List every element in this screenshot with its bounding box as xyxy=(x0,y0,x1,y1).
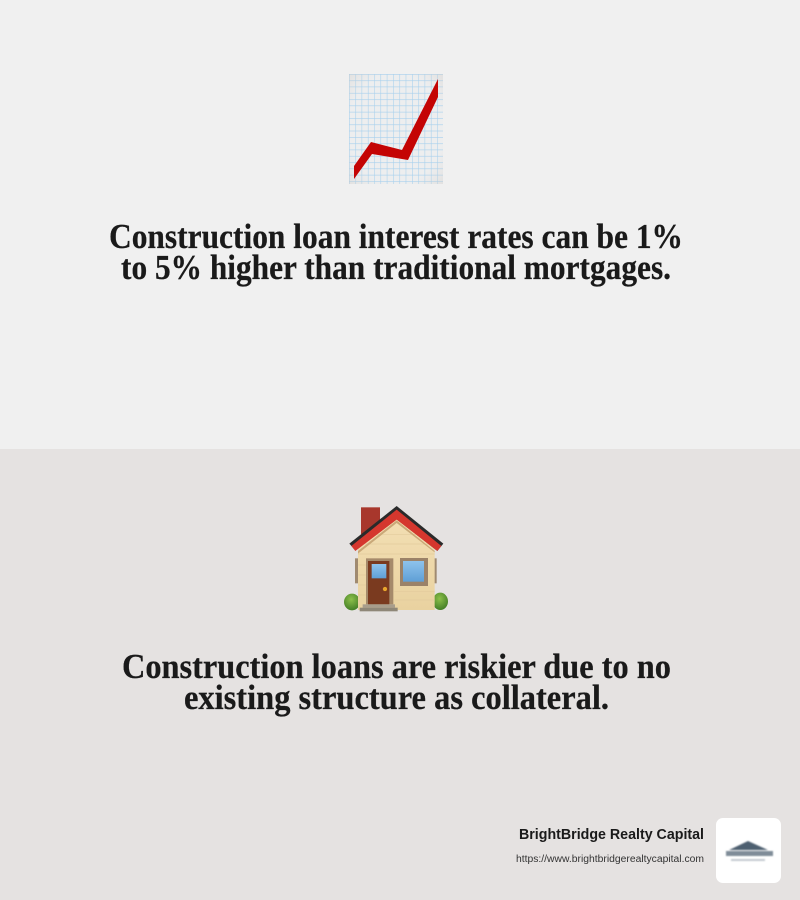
icon: house xyxy=(344,506,448,611)
heading: collateral statement: Construction loans are riskier due to no xyxy=(122,647,671,686)
panel: collateral risk xyxy=(0,449,800,900)
icon: chart increasing xyxy=(349,74,443,184)
heading: interest rates statement: Construction loan interest rates can be 1% xyxy=(109,217,683,256)
logo card xyxy=(716,818,781,883)
heading: interest rates statement xyxy=(109,217,683,287)
footer: brand xyxy=(516,818,781,883)
panel: interest rates xyxy=(0,0,800,449)
heading: collateral statement: existing structure as collateral. xyxy=(184,678,609,717)
heading: collateral statement xyxy=(122,647,671,717)
brand name: BrightBridge Realty Capital xyxy=(519,827,704,843)
website url: https://www.brightbridgerealtycapital.com xyxy=(516,854,704,865)
heading: interest rates statement: to 5% higher than traditional mortgages. xyxy=(121,248,671,287)
